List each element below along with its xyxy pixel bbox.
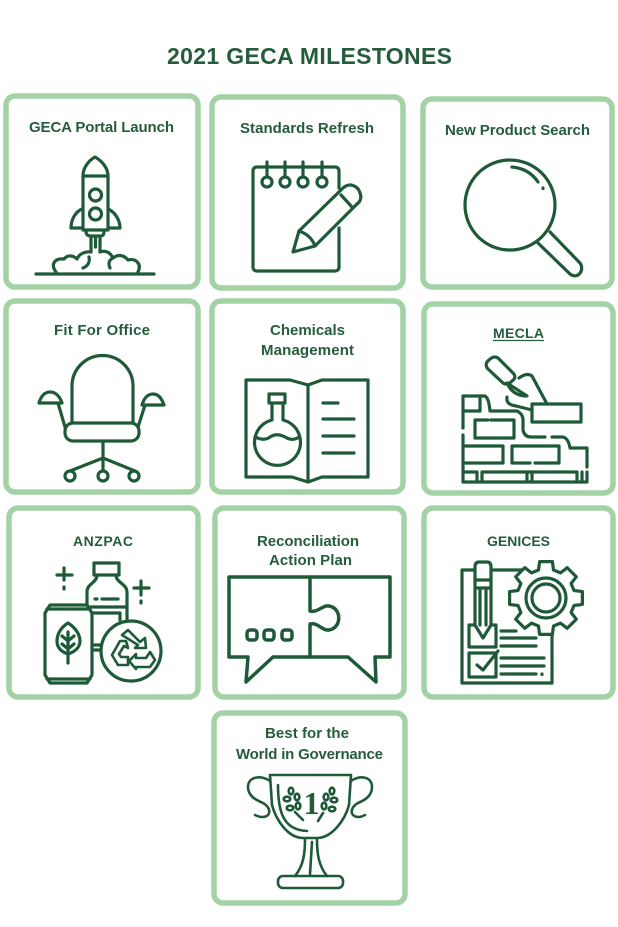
heading: Action Plan	[269, 552, 352, 569]
card frame	[6, 301, 198, 492]
icon: trophy	[248, 775, 372, 888]
icon: office chair	[39, 356, 164, 481]
icon: open book with flask	[246, 380, 368, 482]
card frame	[423, 99, 612, 287]
heading: Fit For Office	[54, 322, 150, 339]
panel: Reconciliation Action Plan	[215, 508, 404, 697]
heading: Management	[261, 342, 354, 359]
panel: ANZPAC	[9, 508, 198, 697]
panel: Chemicals Management	[212, 301, 403, 492]
heading	[261, 322, 354, 359]
card frame	[215, 508, 404, 697]
heading: GECA Portal Launch	[29, 119, 174, 136]
title: 2021 GECA MILESTONES	[167, 43, 452, 69]
heading: New Product Search	[445, 122, 590, 139]
heading: ANZPAC	[73, 533, 133, 549]
panel: New Product Search	[423, 99, 612, 287]
card frame	[212, 97, 403, 288]
icon: magnifying glass	[465, 160, 582, 276]
icon: notepad and pencil	[253, 162, 361, 271]
heading: GENICES	[487, 533, 550, 549]
heading: Standards Refresh	[240, 120, 374, 137]
heading: Reconciliation	[257, 533, 359, 550]
panel: GENICES	[424, 508, 613, 697]
heading: MECLA	[493, 325, 544, 341]
panel: Best for the World in Governance	[214, 713, 405, 903]
icon: puzzle speech bubbles	[229, 577, 390, 682]
card frame	[212, 301, 403, 492]
heading: Best for the	[265, 725, 349, 742]
panel: GECA Portal Launch	[6, 96, 198, 287]
panel: MECLA	[424, 304, 613, 493]
icon: trowel and brick wall	[463, 357, 587, 482]
heading: World in Governance	[236, 746, 383, 763]
card frame	[424, 508, 613, 697]
panel: Standards Refresh	[212, 97, 403, 288]
card frame	[214, 713, 405, 903]
panel: Fit For Office	[6, 301, 198, 492]
card frame	[424, 304, 613, 493]
icon: rocket	[36, 157, 154, 274]
card frame	[6, 96, 198, 287]
heading	[236, 725, 383, 763]
trophy number: 1	[304, 785, 320, 821]
heading: Chemicals	[270, 322, 345, 339]
icon: recycling arrows	[112, 630, 155, 669]
card frame	[9, 508, 198, 697]
icon: clipboard, pencil and gear	[462, 562, 582, 683]
icon: can, bottle and recycling	[45, 563, 161, 683]
heading	[257, 533, 359, 569]
